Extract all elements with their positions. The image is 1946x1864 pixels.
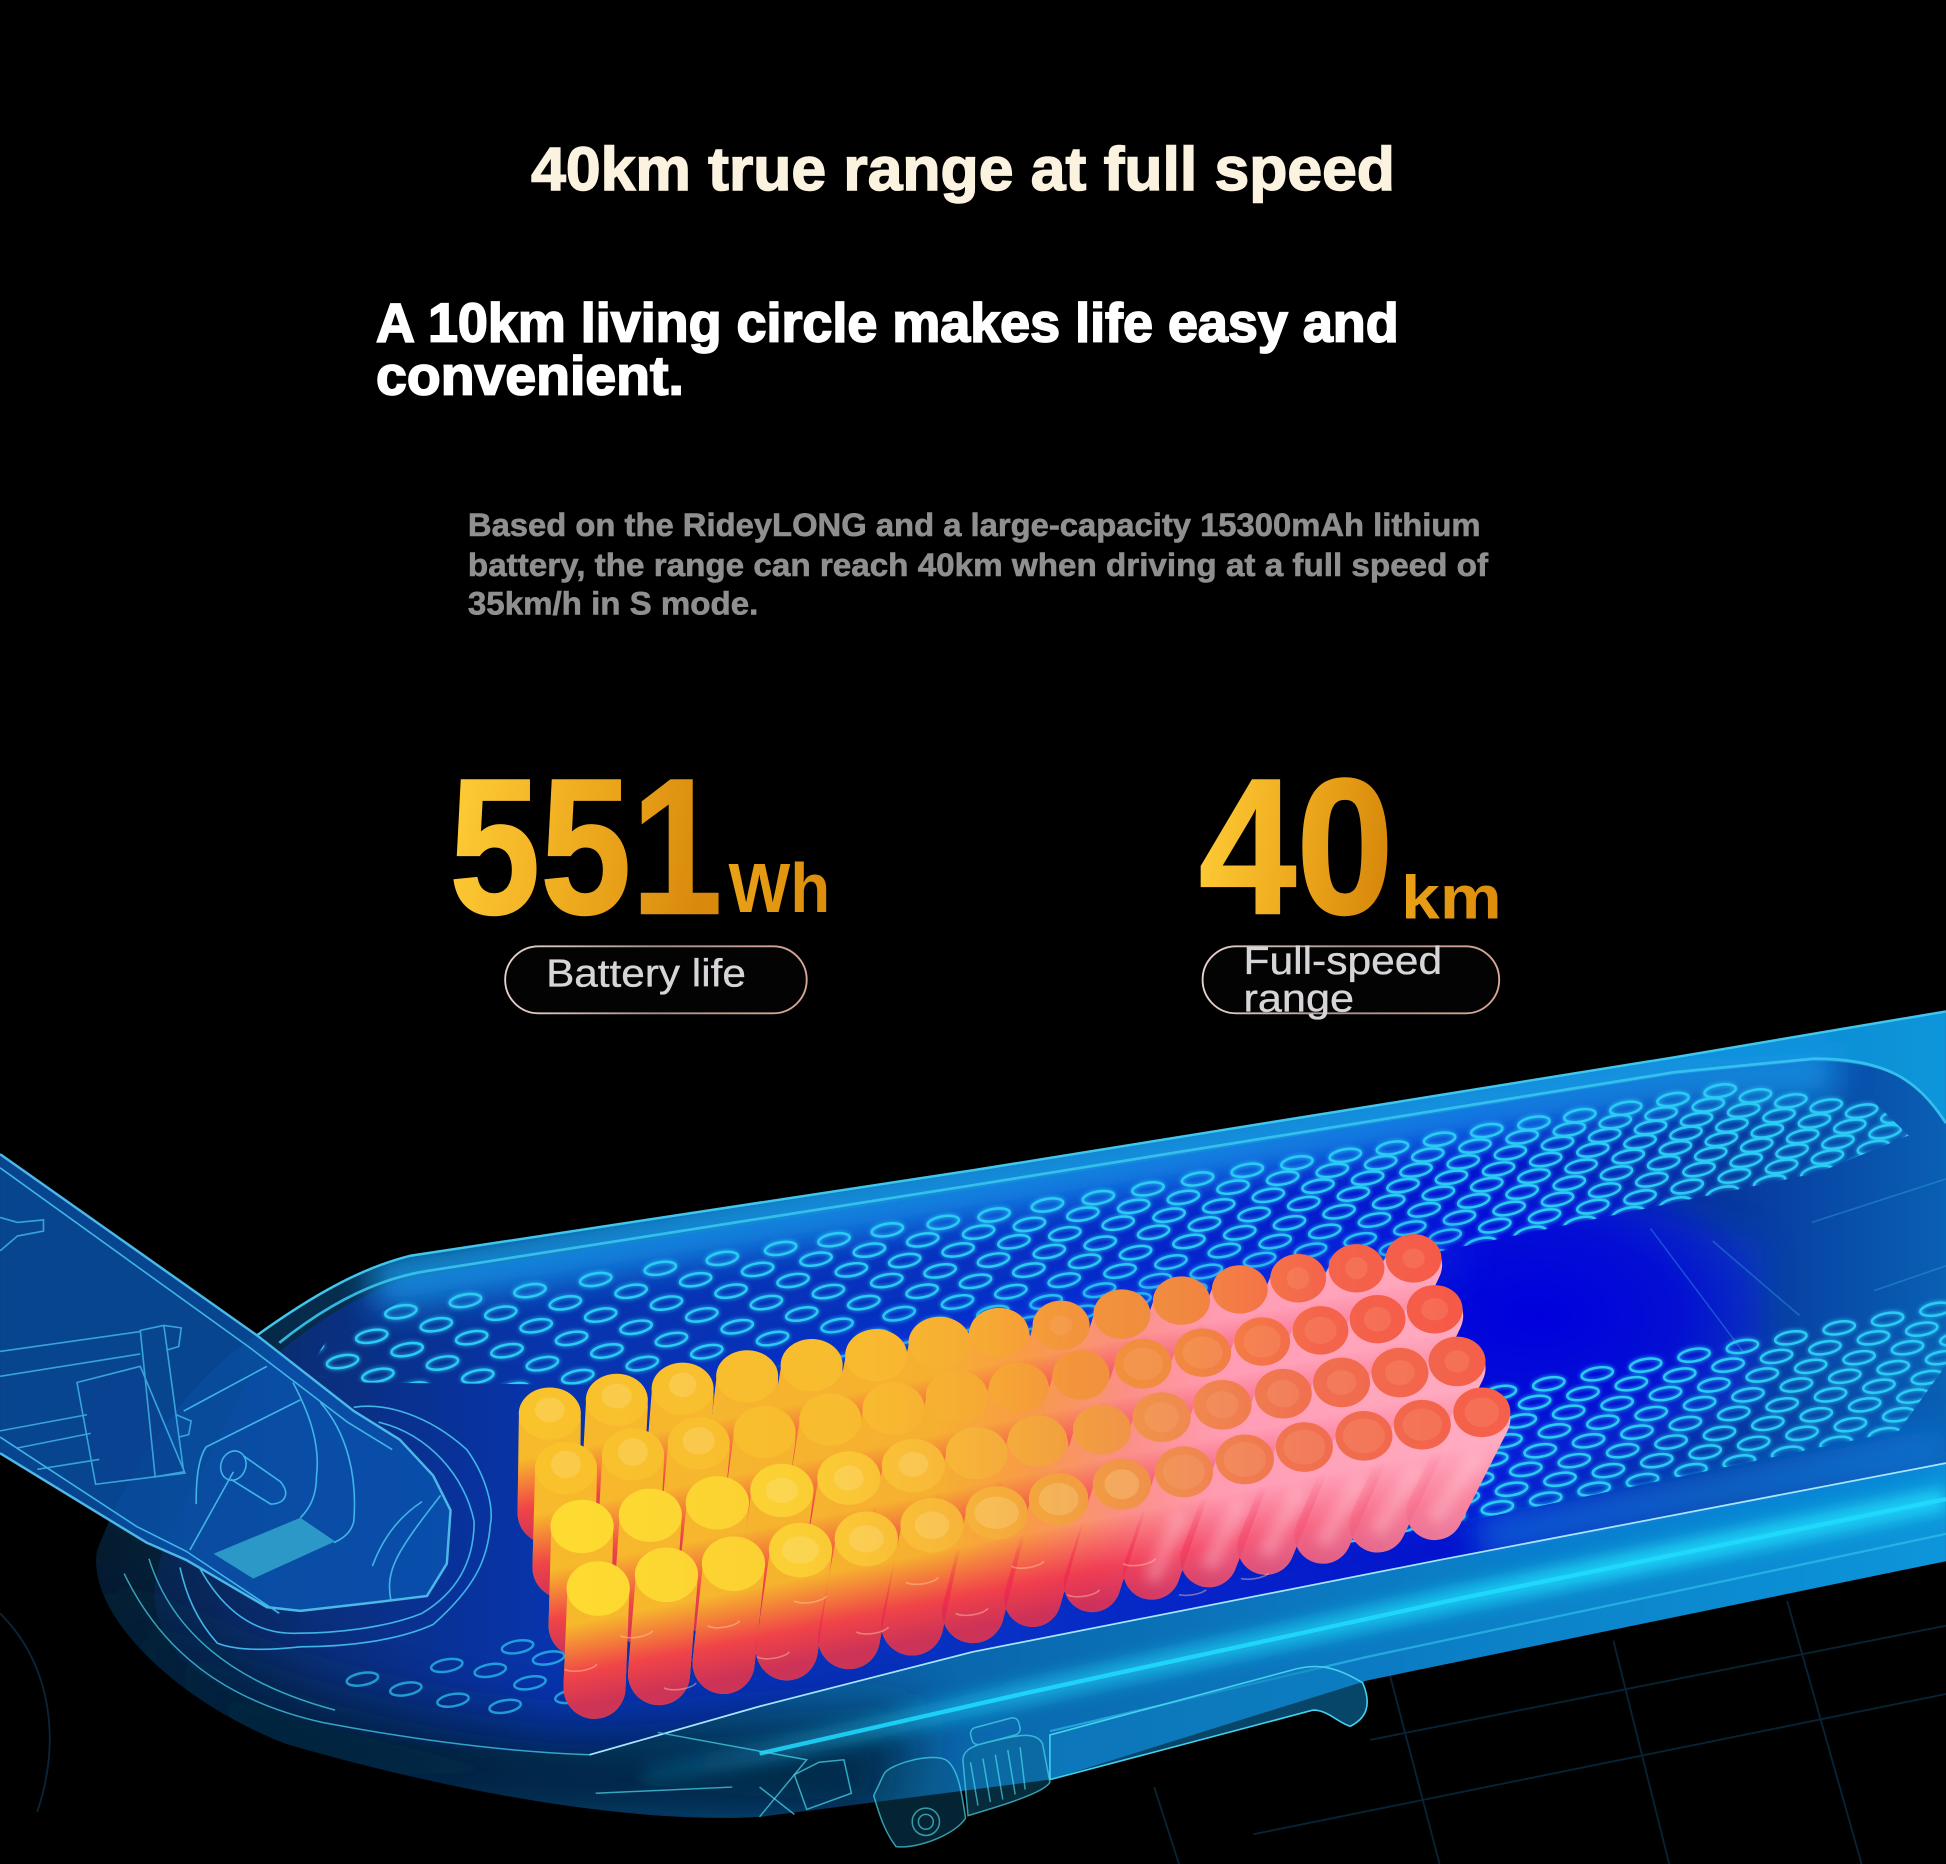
lower left outline curves — [124, 1559, 807, 1817]
cap reflections — [535, 1373, 1139, 1564]
deep blue glow — [1303, 1169, 1775, 1462]
right side plate lines — [1651, 1179, 1946, 1353]
number 40 km: 40 — [1199, 739, 1394, 955]
number 551 Wh: Wh — [729, 849, 830, 927]
pill label: Battery life — [505, 946, 807, 1013]
folding hook — [1050, 1666, 1367, 1780]
subheading: living circle: convenient. — [376, 346, 684, 407]
heading: 40km true range at full speed: 40km true range at full speed — [531, 135, 1395, 203]
upper perforation field — [317, 1080, 1908, 1385]
lower cyan light band — [645, 1499, 1946, 1775]
lit teal face — [214, 1518, 335, 1579]
body text: battery description: Based on the RideyLONG and a large-capacity 15300mAh lithium — [468, 507, 1481, 543]
subheading: living circle — [376, 292, 1399, 407]
lower left shadow — [162, 1623, 948, 1818]
mid-deck holes tint — [794, 1229, 1464, 1402]
battery row 3 — [550, 1337, 1486, 1626]
deck outer shell — [96, 1011, 1946, 1818]
pale body highlights — [1154, 1461, 1474, 1574]
pill label: Full-speed range: range — [1244, 977, 1354, 1020]
pill label: Battery life: Battery life — [546, 953, 746, 996]
stat: 551 Wh battery life — [449, 739, 830, 1013]
stem outlines — [0, 1154, 451, 1611]
stat: 40 km full-speed range — [1199, 739, 1502, 1020]
folding latch mechanism — [760, 1716, 1050, 1847]
pivot inner block — [184, 1366, 441, 1601]
translucent stem body — [0, 1154, 451, 1611]
pill label: Full-speed range: Full-speed — [1244, 940, 1442, 983]
pill label: Full-speed range — [1203, 940, 1499, 1020]
blue centre tint — [646, 1212, 1773, 1500]
upper rim glow — [372, 1070, 1837, 1284]
printed marks on red caps — [1050, 1248, 1499, 1489]
battery row 2 — [535, 1285, 1463, 1567]
thin white plate edge — [590, 1463, 1946, 1755]
ghost perforations showing through — [565, 1559, 1268, 1690]
battery row 4 (front) — [567, 1387, 1510, 1688]
subheading: living circle: A 10km living circle makes life easy and — [376, 292, 1399, 353]
battery row 1 (back) — [519, 1234, 1441, 1513]
upper rim lines — [257, 1011, 1946, 1335]
body text: battery description — [468, 507, 1488, 621]
pivot ring — [180, 1406, 491, 1649]
lower plate glow — [1477, 1446, 1946, 1539]
small cylinder — [190, 1447, 286, 1550]
body text: battery description: 35km/h in S mode. — [468, 585, 758, 621]
number 551 Wh: 551 — [449, 739, 722, 955]
body text: battery description: battery, the range can reach 40km when driving at a full speed of — [468, 547, 1488, 583]
number 40 km: km — [1401, 863, 1502, 931]
handlebar stem with bracket — [0, 1154, 491, 1649]
lower left perforations — [346, 1638, 588, 1715]
deck inner plate — [155, 1061, 1946, 1755]
scooter underside blueprint — [0, 1601, 1946, 1864]
battery pack — [519, 1234, 1510, 1690]
bracket — [0, 1217, 191, 1484]
scooter deck — [75, 1011, 1946, 1847]
lower right perforation field — [1350, 1298, 1946, 1543]
